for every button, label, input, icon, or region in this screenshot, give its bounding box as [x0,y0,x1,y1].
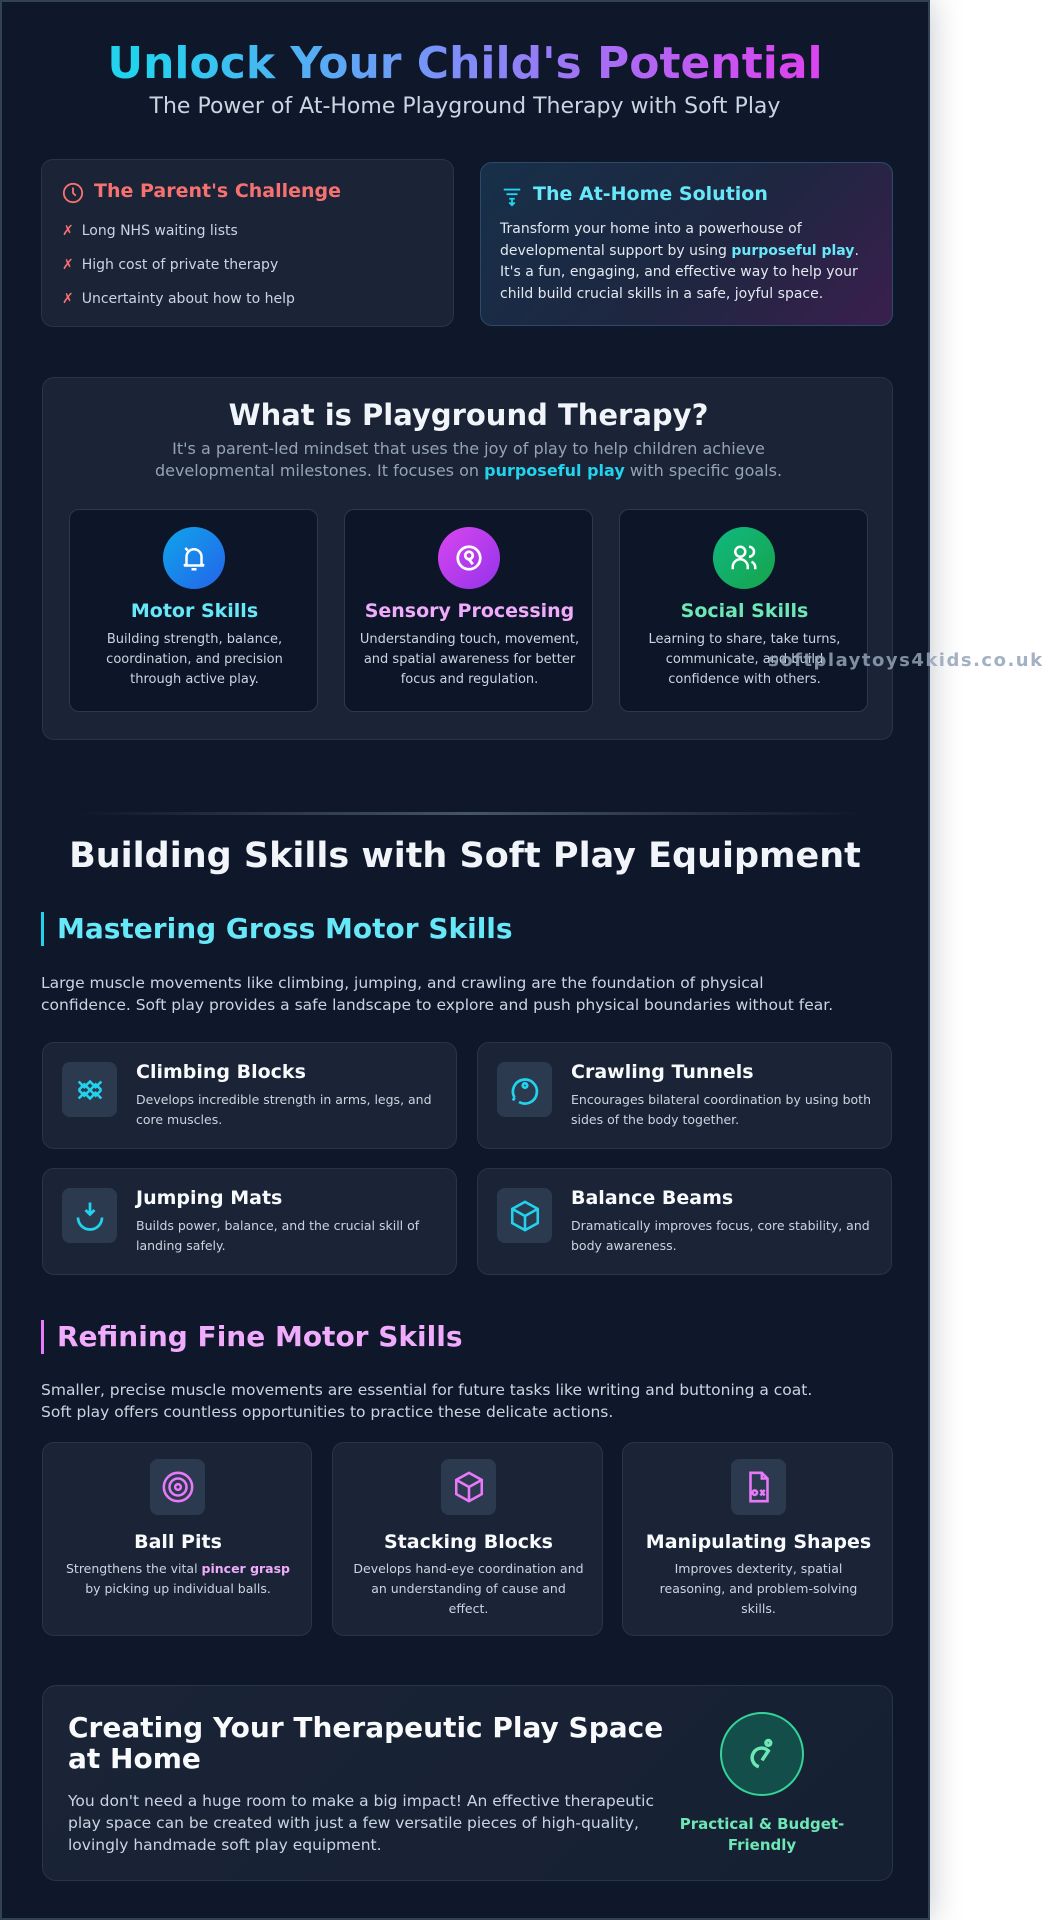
desc: Understanding touch, movement, and spatial awareness for better focus and regulation. [360,632,579,687]
panel: creating play space [42,1685,893,1881]
heading: The At-Home Solution [533,183,768,205]
icon: cube [441,1459,496,1515]
panel: parent's challenge [41,159,454,327]
desc: Encourages bilateral coordination by using both sides of the body together. [571,1092,871,1127]
icon: sensory [438,527,500,589]
card: jumping mats [42,1168,457,1275]
desc: Dramatically improves focus, core stability, and body awareness. [571,1218,870,1253]
title: Ball Pits [134,1531,222,1553]
title: Balance Beams [571,1187,733,1209]
list: ✗ Long NHS waiting lists [62,223,238,239]
heading: building skills: Building Skills with Soft Play Equipment [69,836,861,876]
text: You don't need a huge room to make a big impact! An effective therapeutic play space can be created with just a few versatile pieces of high-quality, lovingly handmade soft play equipment. [68,1792,654,1854]
icon: file shapes [731,1459,786,1515]
label: Practical & Budget-Friendly [680,1815,844,1854]
title: Climbing Blocks [136,1061,306,1083]
heading: The Parent's Challenge [94,180,341,202]
icon: bell [163,527,225,589]
card: social skills [619,509,868,712]
icon [62,1062,117,1117]
desc: Strengthens the vital pincer grasp by picking up individual balls. [66,1561,290,1596]
title: Crawling Tunnels [571,1061,754,1083]
text: fine motor intro: Smaller, precise muscle movements are essential for future tasks like writing and buttoning a coat. Soft play offers countless opportunities to practice these delicate actions. [41,1381,812,1421]
heading: Creating Your Therapeutic Play Space at Home [68,1711,663,1775]
panel: what is playground therapy [42,377,893,740]
title: Manipulating Shapes [646,1531,871,1553]
card: manipulating shapes [622,1442,893,1636]
card: motor skills [69,509,318,712]
list: ✗ High cost of private therapy [62,257,278,273]
card: climbing blocks [42,1042,457,1149]
card: sensory processing [344,509,593,712]
icon [497,1062,552,1117]
icon: budget badge [720,1712,804,1796]
desc: Develops incredible strength in arms, legs, and core muscles. [136,1092,432,1127]
title: Unlock Your Child's Potential [107,38,823,89]
subtitle: The Power of At-Home Playground Therapy with Soft Play [150,94,780,119]
card: crawling tunnels [477,1042,892,1149]
card: ball pits [42,1442,312,1636]
heading: gross motor: Mastering Gross Motor Skills [57,912,513,945]
icon [62,1188,117,1243]
list [62,223,295,307]
card: balance beams [477,1168,892,1275]
intro text: It's a parent-led mindset that uses the joy of play to help children achieve developmental milestones. It focuses on purposeful play with specific goals. [155,439,782,480]
list: ✗ Uncertainty about how to help [62,291,295,307]
desc: Improves dexterity, spatial reasoning, and problem-solving skills. [660,1561,857,1616]
title: Jumping Mats [136,1187,282,1209]
title: Sensory Processing [365,600,574,622]
desc: Building strength, balance, coordination, and precision through active play. [106,632,283,687]
title: Stacking Blocks [384,1531,553,1553]
desc: Develops hand-eye coordination and an understanding of cause and effect. [353,1561,584,1616]
title: Motor Skills [131,600,258,622]
title: Social Skills [681,600,808,622]
icon [497,1188,552,1243]
heading: What is Playground Therapy? [229,398,708,432]
text: Transform your home into a powerhouse of developmental support by using purposeful play. It's a fun, engaging, and effective way to help your child build crucial skills in a safe, joyful space. [500,221,859,302]
heading: fine motor: Refining Fine Motor Skills [57,1320,462,1353]
watermark: softplaytoys4kids.co.uk [768,650,1044,671]
icon: filter [504,188,520,206]
card: stacking blocks [332,1442,603,1636]
text: gross motor intro: Large muscle movements like climbing, jumping, and crawling are the foundation of physical confidence. Soft play provides a safe landscape to explore and push physical boundaries without fear. [41,974,833,1014]
desc: Learning to share, take turns, communicate, and build confidence with others. [649,632,840,687]
icon: people [713,527,775,589]
icon: clock [62,182,84,204]
desc: Builds power, balance, and the crucial skill of landing safely. [136,1218,419,1253]
panel: at-home solution [480,162,893,326]
icon: target [150,1459,205,1515]
